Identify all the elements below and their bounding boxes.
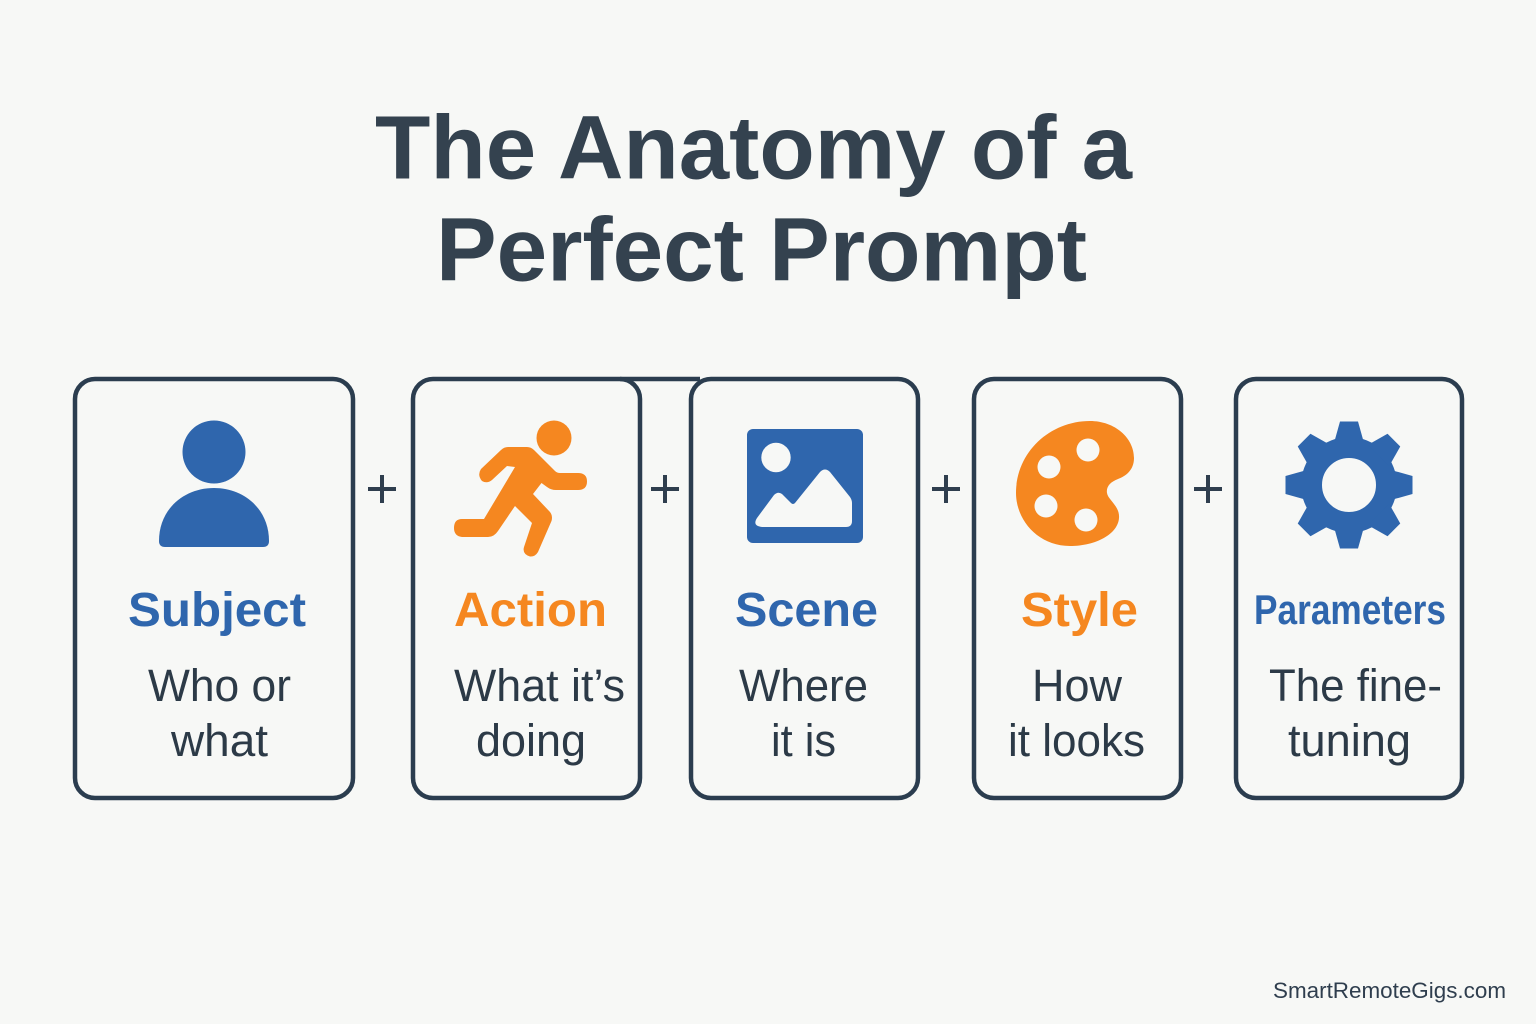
scene card frame [691, 379, 918, 798]
style card frame [974, 379, 1181, 798]
title [375, 98, 1133, 300]
plus sign 3 [932, 475, 960, 503]
icon: gear [1286, 422, 1412, 548]
subject heading: Subject [128, 584, 306, 637]
icon: running figure [454, 420, 587, 557]
icon: person [159, 420, 269, 547]
scene description: Where [739, 660, 868, 711]
panel: style [974, 379, 1181, 798]
icon: palette [1016, 421, 1134, 546]
parameters description: The fine- [1269, 660, 1442, 711]
style description: it looks [1008, 715, 1145, 766]
scene description: it is [771, 715, 836, 766]
subject card frame [75, 379, 353, 798]
style description: How [1032, 660, 1122, 711]
icon: picture [747, 429, 863, 543]
subject description: Who or [148, 660, 291, 711]
parameters description: tuning [1288, 715, 1411, 766]
action description [454, 660, 625, 766]
watermark: SmartRemoteGigs.com [1273, 978, 1506, 1003]
style description [1008, 660, 1145, 766]
action description: What it’s [454, 660, 625, 711]
plus sign 4 [1194, 475, 1222, 503]
action card frame [413, 379, 640, 798]
parameters card frame [1236, 379, 1462, 798]
scene description [739, 660, 868, 766]
parameters description [1269, 660, 1442, 766]
panel: subject [75, 379, 353, 798]
style heading: Style [1021, 584, 1138, 637]
panel: scene [691, 379, 918, 798]
action heading: Action [454, 584, 607, 637]
action description: doing [476, 715, 586, 766]
panel: action [413, 379, 640, 798]
subject description [148, 660, 291, 766]
panel: parameters [1236, 379, 1462, 798]
title: The Anatomy of a [375, 98, 1133, 198]
scene heading: Scene [735, 584, 878, 637]
title: Perfect Prompt [436, 200, 1087, 300]
subject description: what [170, 715, 268, 766]
plus sign 1 [368, 475, 396, 503]
plus sign 2 [651, 475, 679, 503]
parameters heading: Parameters [1254, 586, 1446, 633]
